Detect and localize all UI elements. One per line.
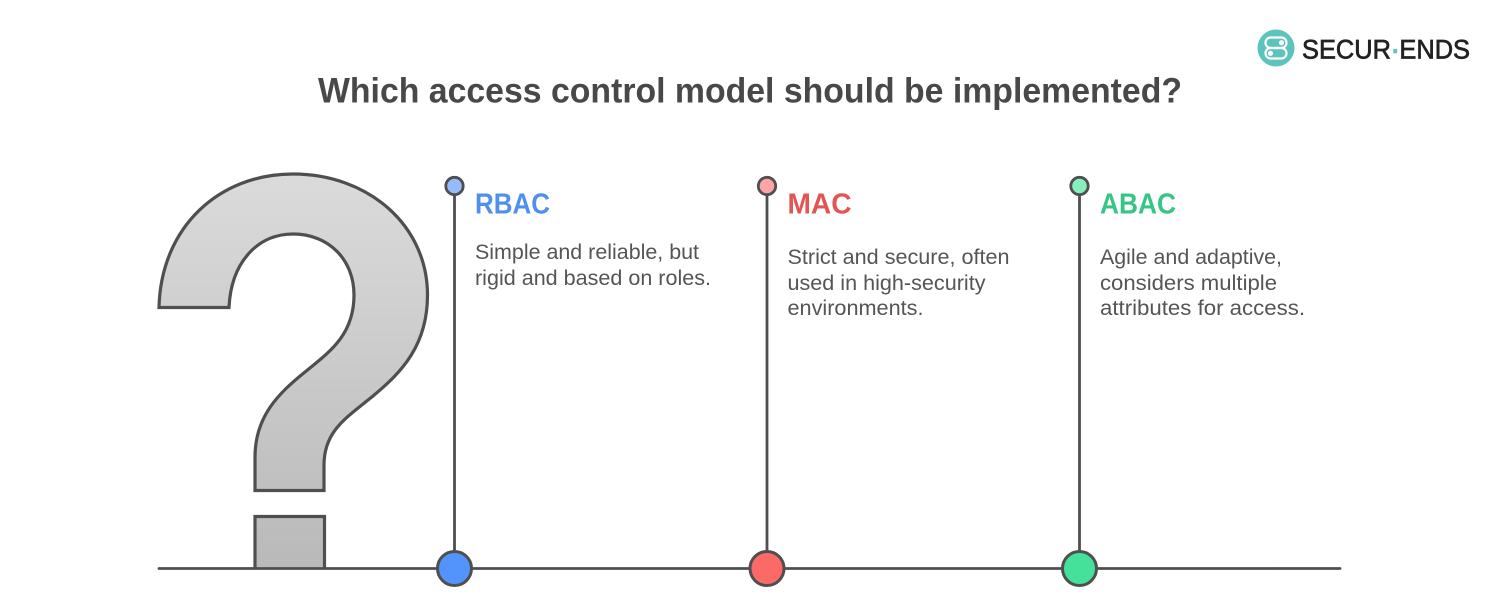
text block: RBAC (475, 188, 711, 290)
marker: RBAC (438, 177, 472, 586)
text block: MAC: MAC (788, 188, 852, 220)
baseline (159, 567, 1340, 570)
logo: SecurEnds: SECUR·ENDS (1302, 34, 1470, 64)
text block: MAC: Strict and secure, often (788, 246, 1010, 269)
marker: ABAC (1062, 177, 1096, 586)
text block: RBAC: rigid and based on roles. (475, 267, 711, 290)
text block: ABAC: ABAC (1100, 188, 1176, 220)
text block: ABAC: Agile and adaptive, (1100, 246, 1282, 269)
marker: MAC (750, 177, 784, 586)
text block: ABAC: considers multiple (1100, 272, 1277, 295)
text block: MAC (788, 188, 1010, 320)
text block: RBAC: RBAC (475, 188, 550, 220)
text block: ABAC (1100, 188, 1305, 320)
text block: RBAC: Simple and reliable, but (475, 241, 699, 264)
icon: question mark (159, 174, 428, 568)
text block: MAC: environments. (788, 297, 924, 320)
title: Which access control model should be implemented? (318, 72, 1182, 110)
text block: ABAC: attributes for access. (1100, 297, 1305, 320)
logo: SecurEnds (1258, 30, 1470, 66)
text block: MAC: used in high-security (788, 272, 986, 295)
